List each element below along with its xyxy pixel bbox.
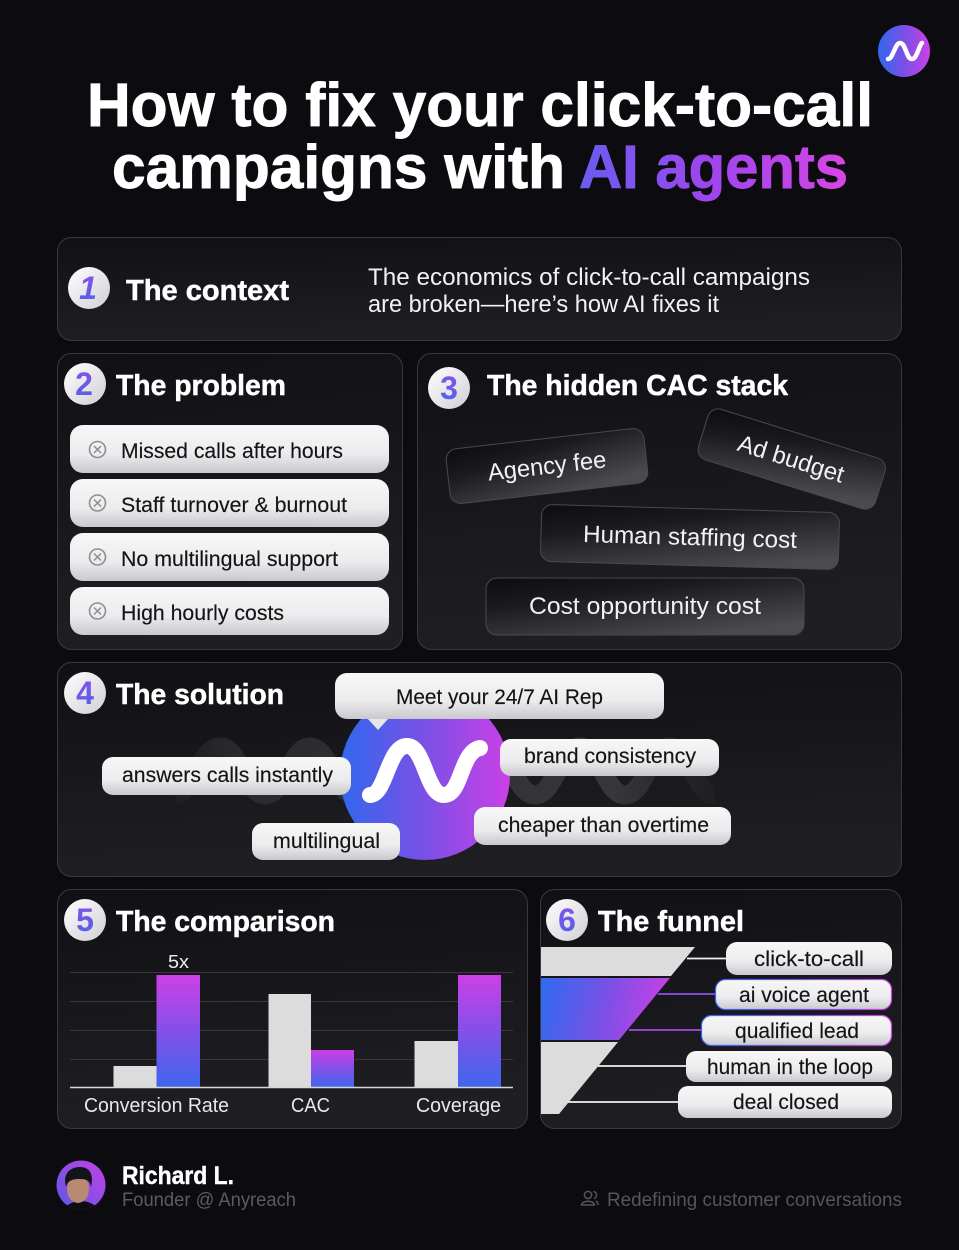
bar chart: Conversion Rate [84, 1094, 229, 1117]
badge 6 [546, 899, 588, 941]
funnel label: ai voice agent [716, 980, 892, 1010]
author name and role [122, 1162, 296, 1211]
pill: cheaper than overtime [474, 807, 731, 845]
badge 1 [68, 267, 110, 309]
badge 2: 2 [75, 366, 93, 402]
title: How to fix your click-to-call [87, 71, 873, 139]
speech bubble: meet your AI rep [335, 673, 664, 730]
problem: multilingual support [70, 533, 389, 581]
funnel label: click-to-call [726, 942, 892, 975]
funnel chart [541, 947, 695, 1114]
problem: staff turnover: Staff turnover & burnout [121, 494, 347, 517]
chip: cost opportunity cost: Cost opportunity cost [529, 593, 761, 620]
panel: the comparison [58, 890, 528, 1128]
context description [368, 264, 810, 318]
funnel label: human in the loop: human in the loop [707, 1056, 873, 1079]
chip: agency fee [445, 427, 649, 505]
pill: cheaper than overtime: cheaper than overtime [498, 814, 709, 837]
chip: cost opportunity cost [486, 578, 804, 635]
title: campaigns with [112, 133, 565, 201]
bar chart: Coverage [416, 1094, 501, 1117]
bar chart: 5x [168, 952, 189, 972]
context description: The economics of click-to-call campaigns [368, 264, 810, 291]
pill: answers calls [102, 757, 351, 795]
tagline with icon: Redefining customer conversations [607, 1189, 902, 1211]
chip: human staffing cost: Human staffing cost [583, 521, 798, 554]
avatar [56, 1160, 106, 1212]
badge 3: 3 [440, 370, 458, 406]
problem: hourly costs [70, 587, 389, 635]
heading: the comparison: The comparison [116, 906, 335, 938]
funnel label: qualified lead: qualified lead [735, 1020, 859, 1043]
heading: the context: The context [126, 275, 289, 307]
author name and role: Founder @ Anyreach [122, 1189, 296, 1211]
problem: staff turnover [70, 479, 389, 527]
problem: hourly costs: High hourly costs [121, 602, 284, 625]
pill: answers calls: answers calls instantly [122, 764, 333, 787]
bar chart [70, 952, 513, 1117]
funnel label: ai voice agent: ai voice agent [739, 984, 869, 1007]
panel: the hidden CAC stack [418, 354, 902, 650]
chip: ad budget [695, 406, 888, 512]
badge 3 [428, 367, 470, 409]
title [87, 71, 873, 201]
funnel label: deal closed: deal closed [733, 1091, 839, 1114]
funnel label: deal closed [678, 1086, 892, 1118]
funnel label: qualified lead [702, 1016, 892, 1046]
funnel label: click-to-call: click-to-call [754, 948, 864, 971]
heading: the problem: The problem [116, 370, 286, 402]
faded wave [175, 747, 715, 795]
badge 1: 1 [79, 270, 97, 306]
pill: brand consistency [500, 739, 719, 776]
bar chart: CAC [291, 1094, 330, 1117]
problem: multilingual support: No multilingual support [121, 548, 338, 571]
heading: hidden CAC stack: The hidden CAC stack [487, 370, 789, 402]
pill: brand consistency: brand consistency [524, 745, 697, 768]
badge 6: 6 [558, 902, 576, 938]
speech bubble: meet your AI rep: Meet your 24/7 AI Rep [396, 686, 603, 709]
panel: the context [58, 238, 902, 340]
funnel connector lines [568, 958, 730, 1102]
chip: ad budget: Ad budget [734, 430, 848, 489]
heading: the solution: The solution [116, 679, 284, 711]
panel: the funnel [540, 890, 902, 1128]
badge 5: 5 [76, 902, 94, 938]
badge 4 [64, 672, 106, 714]
panel: the problem [58, 354, 402, 650]
funnel label: human in the loop [686, 1051, 892, 1082]
context description: are broken—here’s how AI fixes it [368, 291, 719, 318]
AI rep logo orb [340, 690, 510, 860]
author name and role: Richard L. [122, 1162, 234, 1190]
chip: agency fee: Agency fee [486, 446, 608, 487]
panel: the solution [58, 662, 902, 876]
title: AI agents [579, 133, 848, 201]
pill: multilingual [252, 823, 400, 860]
badge 4: 4 [76, 675, 94, 711]
logo [878, 25, 930, 77]
heading: the funnel: The funnel [598, 906, 744, 938]
pill: multilingual: multilingual [273, 830, 380, 853]
badge 2 [64, 363, 106, 405]
problem: missed calls: Missed calls after hours [121, 440, 343, 463]
chip: human staffing cost [540, 504, 840, 570]
problem: missed calls [70, 425, 389, 473]
badge 5 [64, 899, 106, 941]
